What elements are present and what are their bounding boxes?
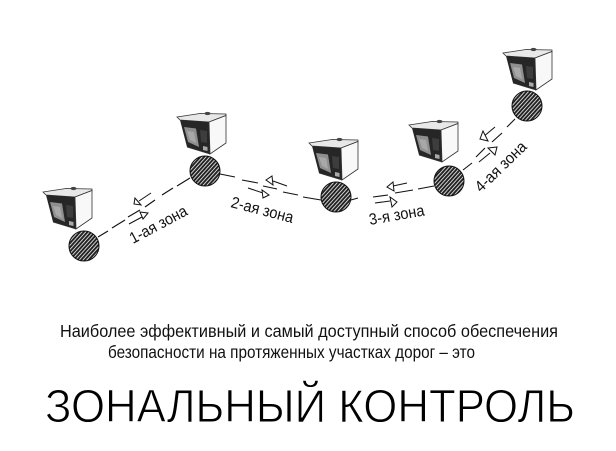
label: zone 4: 4-ая зона [472, 138, 531, 196]
subtitle text: безопасности на протяженных участках дорог – это [108, 342, 475, 362]
label: zone 3: 3-я зона [368, 202, 426, 229]
icon: camera 4 [409, 120, 458, 162]
arrows: zone 1 [129, 193, 151, 224]
icon: camera 2 [177, 112, 226, 154]
icon: camera 1 [43, 187, 92, 229]
zone node 5 [512, 91, 542, 121]
subtitle text: Наиболее эффективный и самый доступный способ обеспечения [60, 321, 558, 341]
zone node 2 [190, 156, 220, 186]
title: ЗОНАЛЬНЫЙ КОНТРОЛЬ [45, 380, 575, 432]
road line: dashed route between cameras [98, 119, 515, 237]
label: zone 2: 2-ая зона [229, 194, 295, 227]
arrows: zone 4 [479, 127, 497, 162]
zone node 3 [321, 182, 351, 212]
arrows: zone 2 [248, 176, 287, 198]
zone node 4 [434, 166, 464, 196]
label: zone 1: 1-ая зона [127, 203, 191, 248]
icon: camera 5 [503, 48, 552, 90]
icon: camera 3 [309, 138, 358, 180]
zone node 1 [69, 231, 99, 261]
subtitle text [60, 321, 558, 362]
arrows: zone 3 [375, 182, 407, 207]
